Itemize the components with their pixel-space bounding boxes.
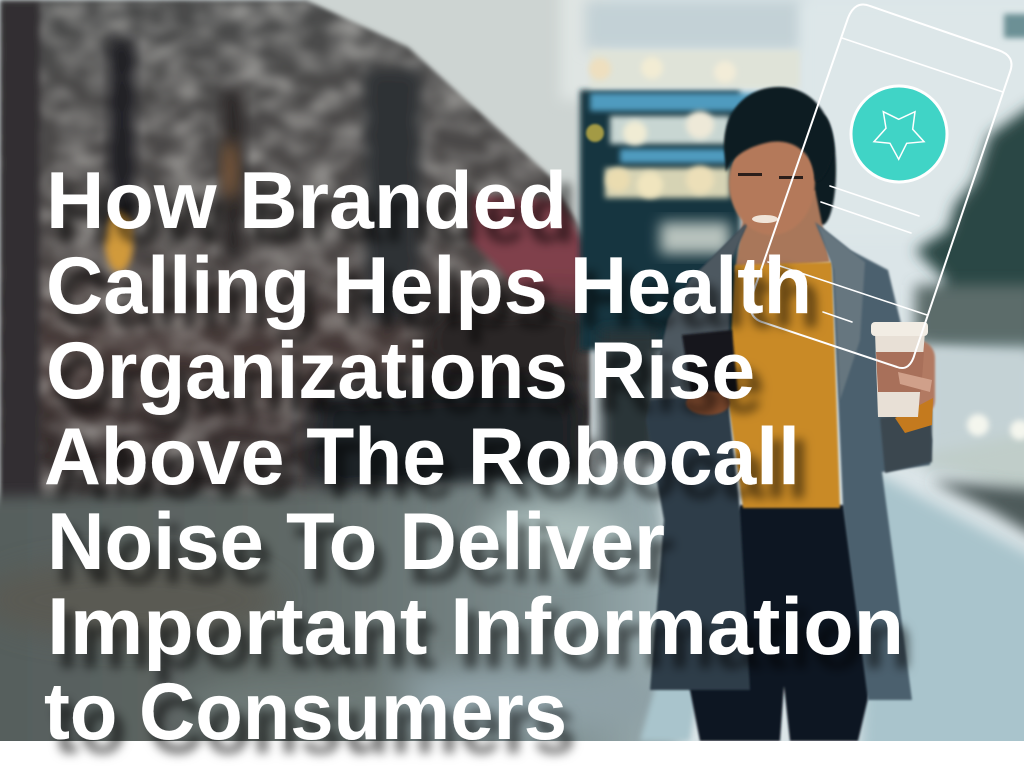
title: Noise To Deliver bbox=[47, 497, 665, 587]
title bbox=[44, 156, 904, 757]
title: How Branded bbox=[46, 156, 567, 246]
pale wall and distant buildings bbox=[280, 0, 1024, 280]
coat right side bbox=[815, 222, 932, 700]
phone text lines bbox=[821, 186, 919, 322]
red awning bbox=[468, 192, 582, 312]
trousers bbox=[688, 505, 870, 741]
right pavement and bright storefronts bbox=[640, 345, 1024, 760]
phone body bbox=[750, 4, 1012, 368]
woman holding coffee and phone bbox=[646, 87, 935, 741]
title: to Consumers bbox=[44, 667, 567, 757]
orange sweater bbox=[728, 262, 840, 508]
stone building on the left bbox=[0, 0, 612, 520]
trees on the right bbox=[915, 14, 1024, 360]
phone illustration outline bbox=[750, 4, 1012, 368]
coat left side bbox=[646, 222, 750, 690]
hand with phone bbox=[682, 330, 738, 398]
phone top divider bbox=[842, 38, 1003, 92]
hand on cup bbox=[918, 340, 936, 411]
neck bbox=[735, 190, 830, 272]
title: Organizations Rise bbox=[46, 326, 755, 416]
ponytail bbox=[808, 115, 836, 225]
icon: teal circle with star bbox=[851, 86, 947, 182]
title: Important Information bbox=[47, 582, 904, 672]
phone bottom divider bbox=[768, 262, 927, 315]
blue building with lit windows bbox=[580, 50, 800, 460]
street lantern glow bbox=[105, 212, 133, 272]
title: Calling Helps Health bbox=[46, 241, 812, 331]
hair top bbox=[724, 87, 834, 181]
coffee cup bbox=[875, 332, 925, 417]
face bbox=[729, 131, 815, 235]
title: Above The Robocall bbox=[44, 412, 800, 502]
sidewalk bbox=[0, 470, 680, 760]
